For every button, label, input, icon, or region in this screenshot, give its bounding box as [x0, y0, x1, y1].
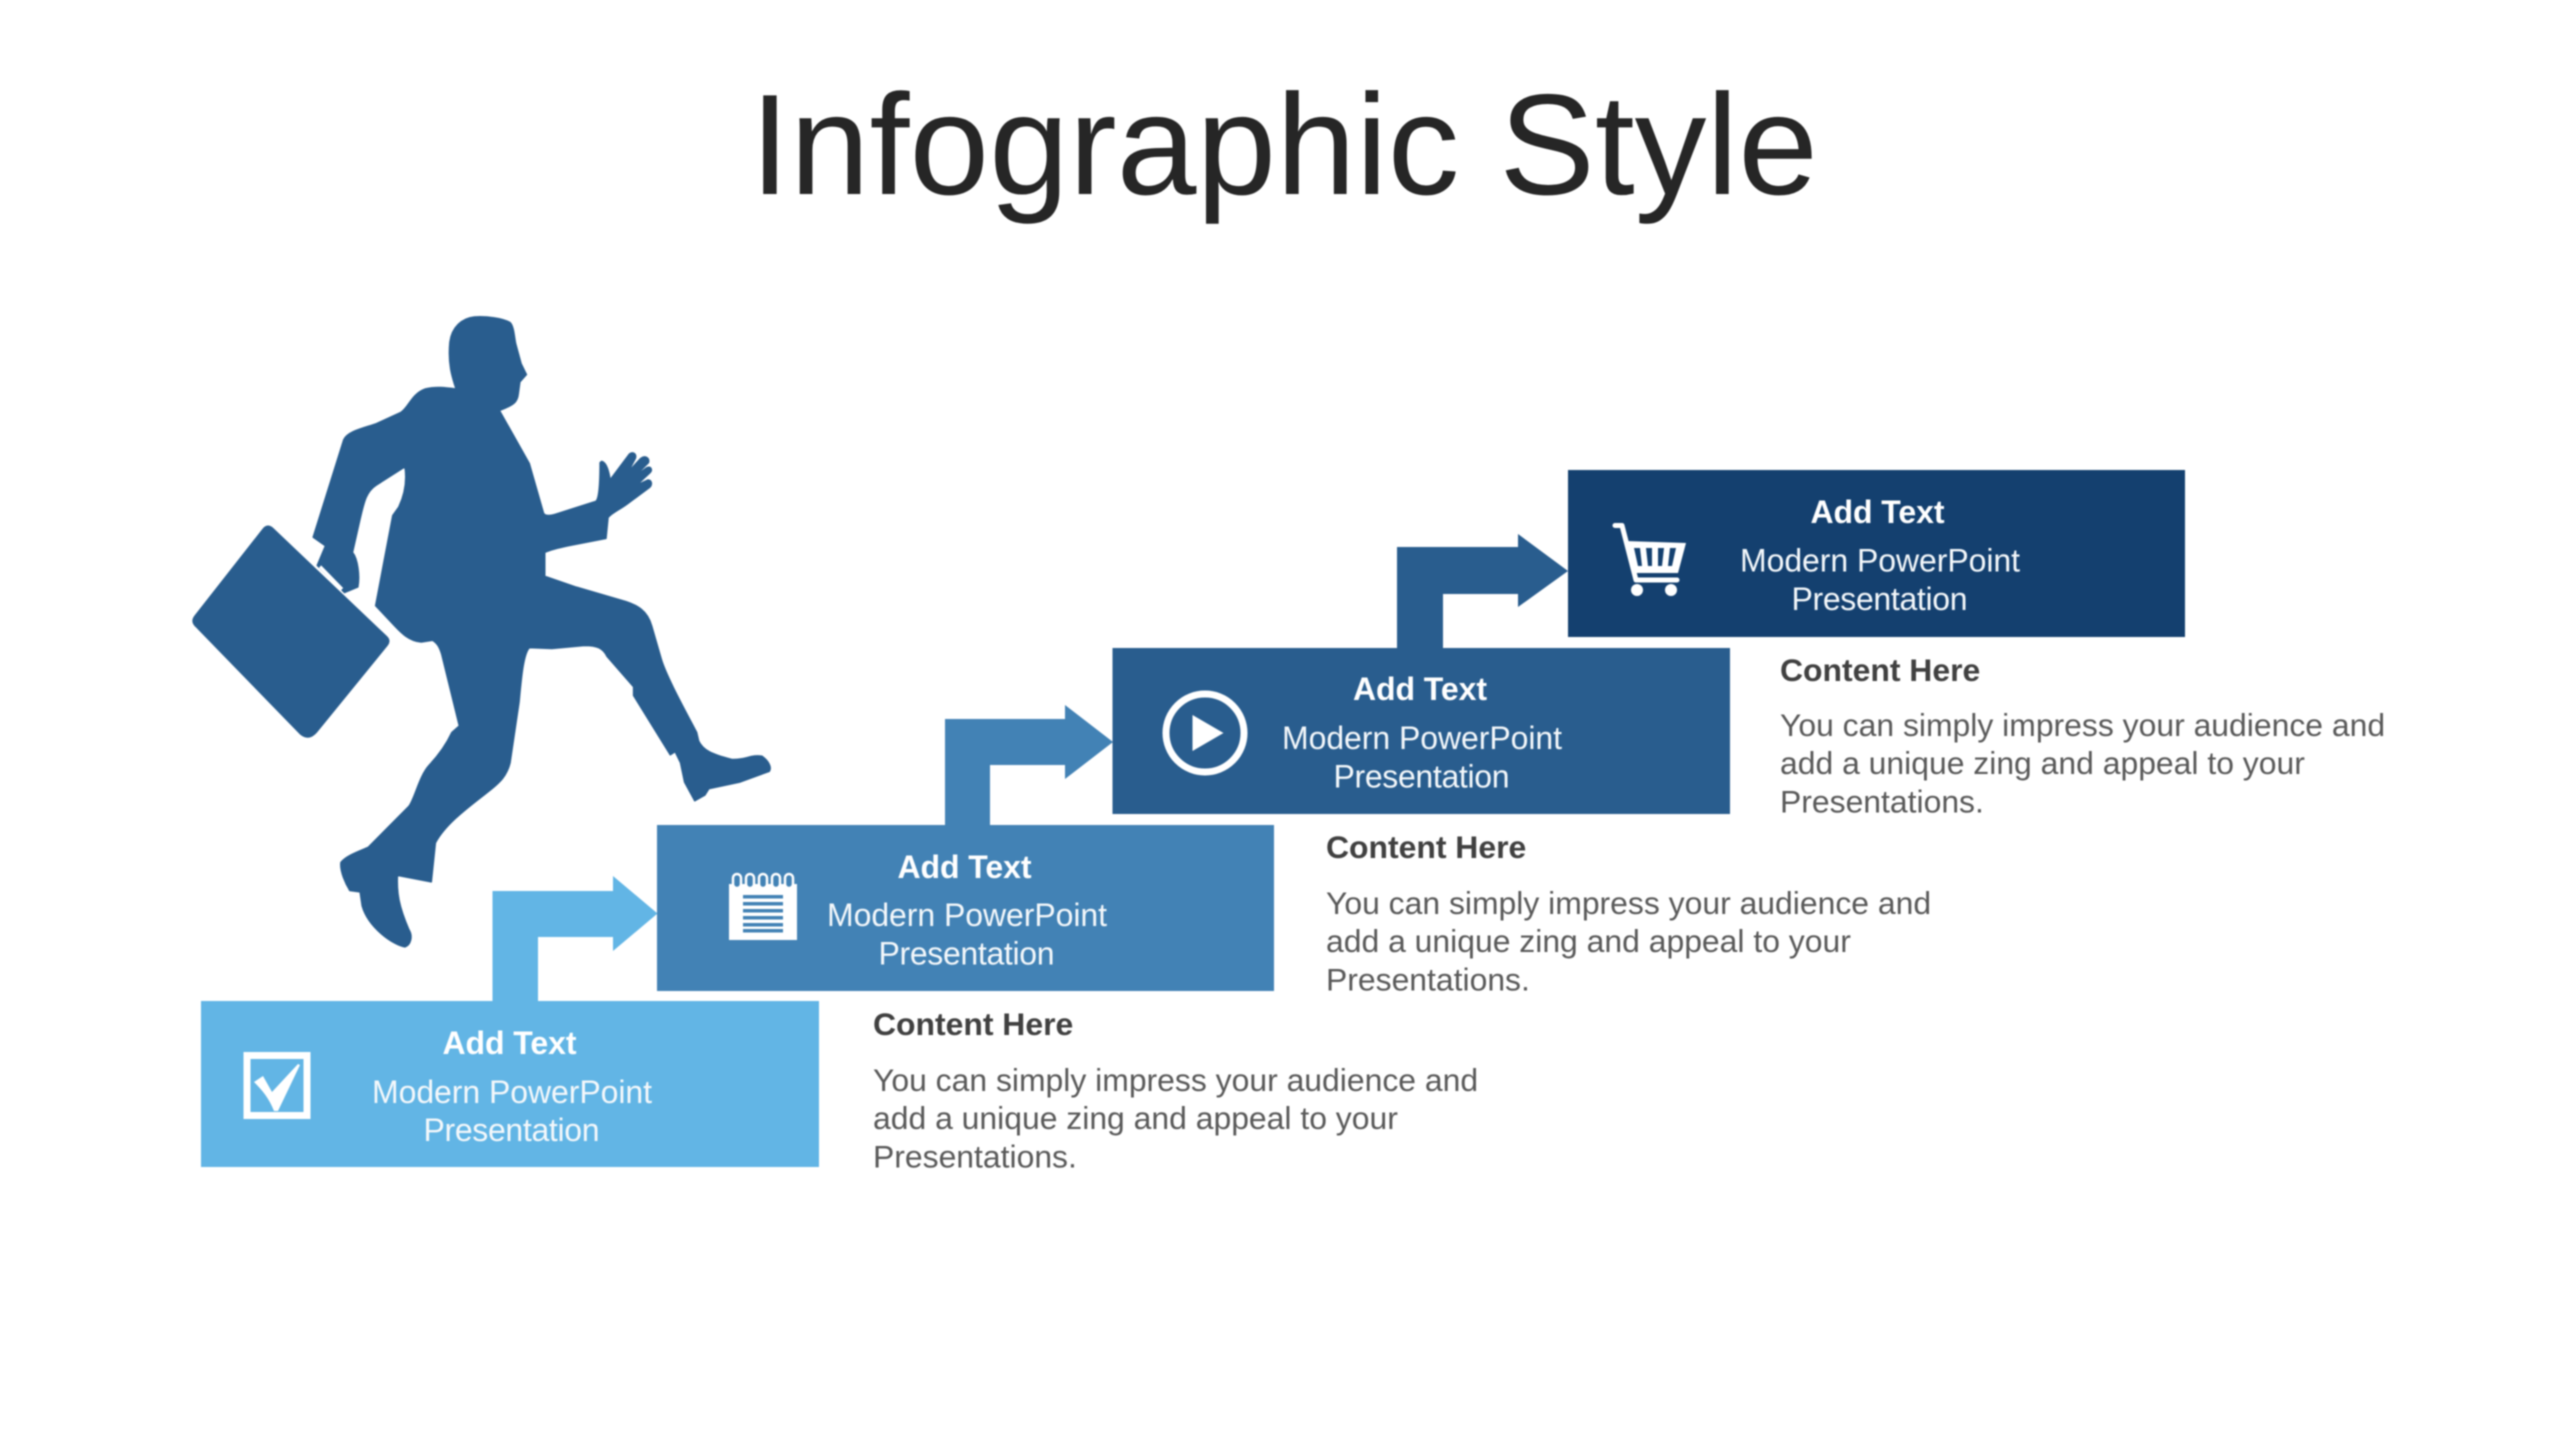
- box: [657, 825, 1274, 991]
- body: Presentations.: [1326, 962, 1530, 998]
- body: add a unique zing and appeal to your: [1326, 923, 1851, 959]
- panel: step 3: [1112, 648, 1730, 814]
- body: Presentations.: [873, 1138, 1077, 1174]
- subtitle line 1: Modern PowerPoint: [1740, 542, 2020, 578]
- heading: Content Here: [1780, 652, 1980, 688]
- briefcase handle gap: [320, 567, 342, 589]
- man silhouette: [313, 317, 770, 947]
- icon: checkbox: [247, 1056, 307, 1116]
- icon: shopping cart: [1615, 526, 1686, 596]
- text block: content 1: [873, 1006, 1478, 1174]
- icon: play button: [1166, 694, 1244, 772]
- subtitle line 2: Presentation: [424, 1112, 600, 1148]
- subtitle line 2: Presentation: [878, 936, 1054, 972]
- title: Infographic Style: [750, 65, 1818, 225]
- panel: step 2: [657, 825, 1274, 991]
- box: [1112, 648, 1730, 814]
- subtitle line 1: Modern PowerPoint: [1282, 720, 1562, 756]
- heading: Add Text: [442, 1025, 577, 1061]
- subtitle line 2: Presentation: [1334, 758, 1510, 794]
- arrow: step 3 to step 4: [1397, 534, 1568, 649]
- heading: Content Here: [873, 1006, 1073, 1042]
- figure: businessman with briefcase climbing steps: [192, 317, 770, 947]
- heading: Add Text: [1353, 671, 1487, 707]
- body: You can simply impress your audience and: [1326, 885, 1931, 921]
- heading: Add Text: [898, 849, 1032, 885]
- body: You can simply impress your audience and: [873, 1062, 1478, 1098]
- heading: Content Here: [1326, 829, 1526, 865]
- heading: Add Text: [1810, 494, 1945, 530]
- arrow: step 1 to step 2: [492, 876, 658, 1003]
- icon: notepad: [729, 874, 797, 940]
- panel: step 1: [201, 1001, 819, 1167]
- briefcase: [192, 526, 390, 738]
- box: [1568, 470, 2185, 637]
- subtitle line 1: Modern PowerPoint: [372, 1074, 652, 1110]
- body: Presentations.: [1780, 784, 1984, 820]
- subtitle line 2: Presentation: [1792, 581, 1968, 617]
- panel: step 4: [1568, 470, 2185, 637]
- arrow: step 2 to step 3: [945, 705, 1113, 827]
- body: add a unique zing and appeal to your: [873, 1100, 1398, 1136]
- text block: content 2: [1326, 829, 1931, 998]
- subtitle line 1: Modern PowerPoint: [827, 897, 1107, 933]
- text block: content 3: [1780, 652, 2385, 820]
- body: You can simply impress your audience and: [1780, 707, 2385, 743]
- box: [201, 1001, 819, 1167]
- body: add a unique zing and appeal to your: [1780, 745, 2305, 781]
